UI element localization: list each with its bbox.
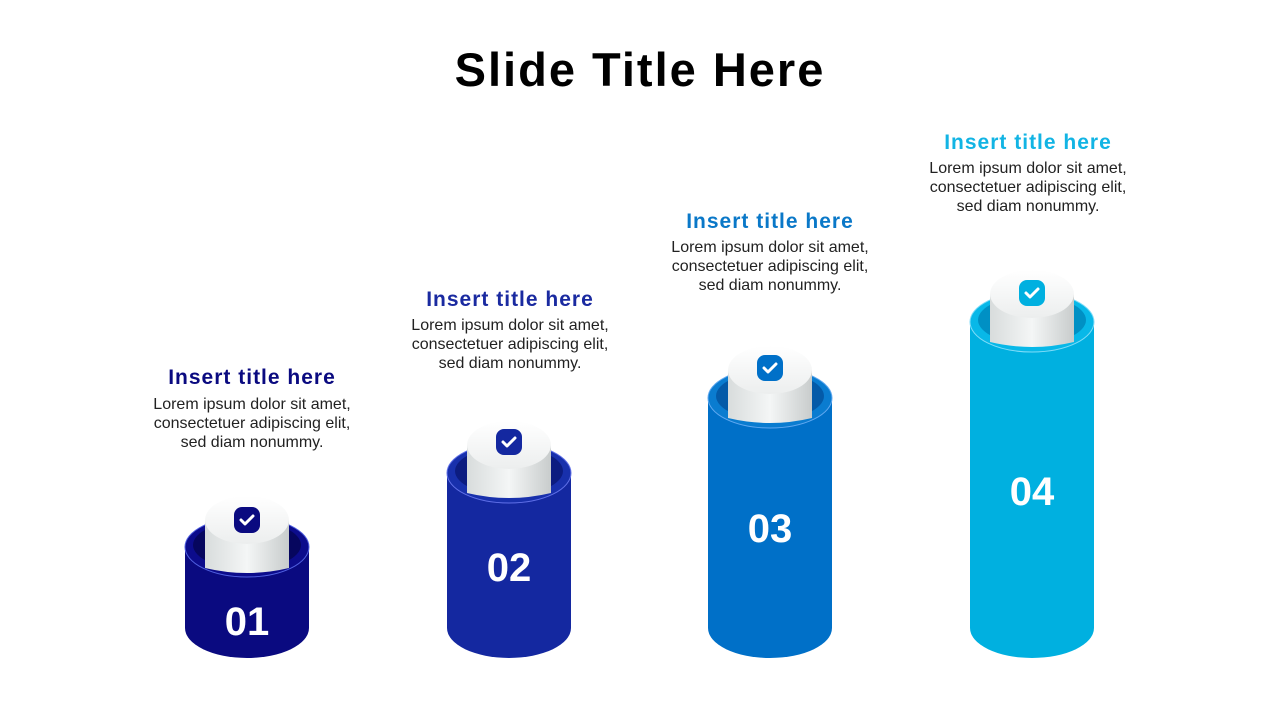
text: item 3: [671, 210, 869, 294]
cylinder 1: 01: [225, 600, 269, 644]
title: Slide Title Here: [455, 43, 825, 96]
text: item 3: consectetuer adipiscing elit,: [672, 258, 868, 275]
text: item 3: Insert title here: [686, 210, 854, 233]
text: item 1: Lorem ipsum dolor sit amet,: [153, 396, 351, 413]
text: item 2: [411, 288, 609, 372]
text: item 1: consectetuer adipiscing elit,: [154, 415, 350, 432]
cylinder 4: [970, 270, 1094, 658]
text: item 4: Lorem ipsum dolor sit amet,: [929, 160, 1127, 177]
text: item 1: Insert title here: [168, 366, 336, 389]
item 3: [671, 210, 869, 658]
cylinder 2: [447, 421, 571, 658]
text: item 4: sed diam nonummy.: [957, 198, 1099, 215]
cylinder 3: [708, 346, 832, 658]
text: item 2: Insert title here: [426, 288, 594, 311]
text: item 3: sed diam nonummy.: [699, 277, 841, 294]
text: item 2: sed diam nonummy.: [439, 355, 581, 372]
text: item 1: sed diam nonummy.: [181, 434, 323, 451]
text: item 4: Insert title here: [944, 131, 1112, 154]
text: item 3: Lorem ipsum dolor sit amet,: [671, 239, 869, 256]
text: item 4: [929, 131, 1127, 215]
item 4: [929, 131, 1127, 658]
cylinder 1: [185, 496, 309, 658]
text: item 2: consectetuer adipiscing elit,: [412, 336, 608, 353]
text: item 4: consectetuer adipiscing elit,: [930, 179, 1126, 196]
item 2: [411, 288, 609, 658]
item 1: [153, 366, 351, 658]
cylinder 4: 04: [1010, 470, 1055, 514]
text: item 1: [153, 366, 351, 451]
cylinder 3: 03: [748, 507, 792, 551]
text: item 2: Lorem ipsum dolor sit amet,: [411, 317, 609, 334]
cylinder 2: 02: [487, 546, 531, 590]
